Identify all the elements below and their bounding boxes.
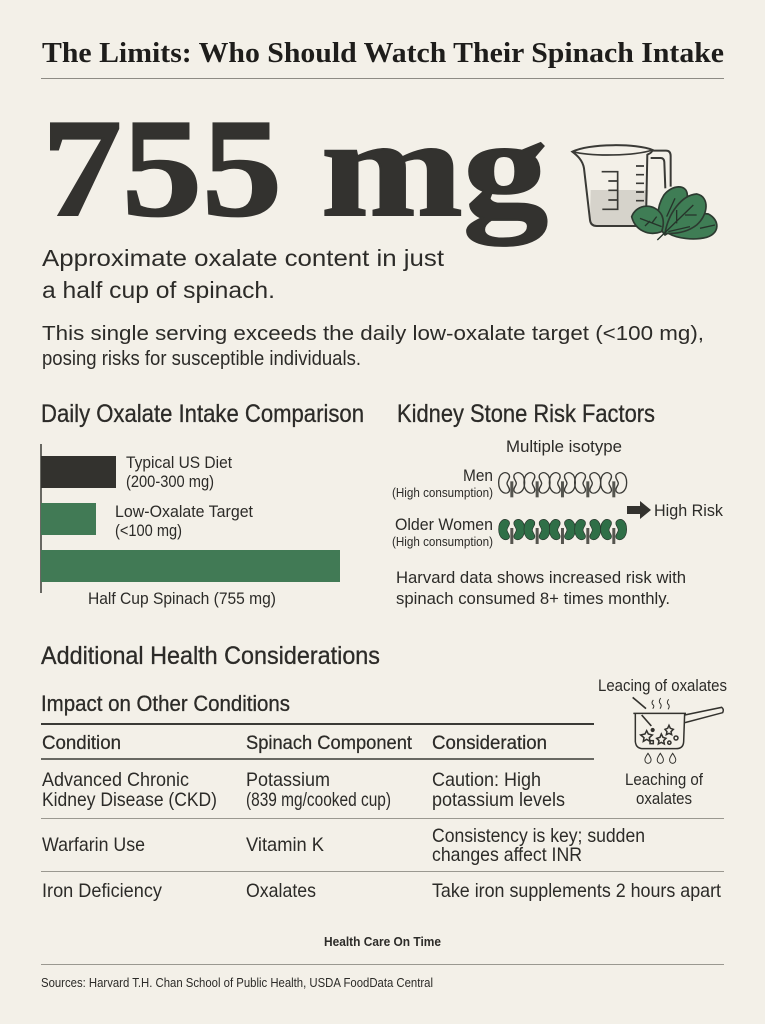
kidney risk graphic: [392, 437, 723, 549]
row: iron deficiency: Take iron supplements 2 hours apart: [432, 880, 722, 902]
row: warfarin: Consistency is key; sudden: [432, 825, 645, 847]
bar: typical US diet: [41, 453, 232, 491]
bar chart: daily oxalate intake: [41, 444, 340, 608]
big number: 755 mg: 755: [42, 91, 282, 246]
heading: daily oxalate intake comparison: Daily Oxalate Intake Comparison: [41, 400, 364, 428]
row: iron deficiency: [42, 880, 722, 902]
text block: serving exceeds target: posing risks for susceptible individuals.: [42, 347, 361, 370]
text block: Harvard data: Harvard data shows increased risk with: [396, 568, 686, 587]
arrow: high risk: [627, 501, 651, 519]
bar: typical US diet: Typical US Diet: [126, 453, 232, 472]
table header: Spinach Component: [246, 732, 413, 754]
text block: Harvard data: spinach consumed 8+ times monthly.: [396, 589, 670, 608]
row: warfarin: Vitamin K: [246, 834, 324, 856]
row: warfarin: changes affect INR: [432, 844, 582, 866]
row: CKD: potassium levels: [432, 789, 565, 811]
subheading: approximate oxalate content: [42, 245, 445, 303]
icon: pot with leaching oxalates: [598, 676, 727, 808]
subheading: approximate oxalate content: Approximate oxalate content in just: [42, 245, 445, 271]
heading: kidney stone risk factors: Kidney Stone Risk Factors: [397, 400, 655, 428]
sources: Sources: Harvard T.H. Chan School of Public Health, USDA FoodData Central: [41, 976, 433, 990]
row: CKD: Advanced Chronic: [42, 769, 189, 791]
row: CKD: [42, 769, 565, 811]
row: men: (High consumption): [392, 486, 493, 500]
row: older women: [392, 515, 627, 549]
bar: low-oxalate target: (<100 mg): [115, 521, 182, 540]
row: older women: Older Women: [395, 515, 493, 534]
row: CKD: Potassium: [246, 769, 330, 791]
row: men: [392, 466, 627, 500]
row: men: Men: [463, 466, 493, 485]
row: CKD: (839 mg/cooked cup): [246, 789, 391, 811]
text block: Harvard data: [396, 568, 686, 608]
title: The Limits: Who Should Watch Their Spinach Intake: [42, 37, 724, 69]
subheading: impact on other conditions: Impact on Other Conditions: [41, 691, 290, 716]
table header: Condition: [42, 732, 121, 754]
heading: additional health considerations: Additional Health Considerations: [41, 642, 380, 670]
row: iron deficiency: Iron Deficiency: [42, 880, 162, 902]
icon: pot with leaching oxalates: Leacing of oxalates: [598, 676, 727, 695]
icon: pot with leaching oxalates: oxalates: [636, 789, 692, 808]
icon: pot with leaching oxalates: Leaching of: [625, 770, 703, 789]
bar: low-oxalate target: Low-Oxalate Target: [115, 502, 253, 521]
bar: half cup spinach: [41, 550, 340, 608]
bar: typical US diet: (200-300 mg): [126, 472, 214, 491]
brand: health care on time: Health Care On Time: [324, 935, 441, 949]
row: older women: (High consumption): [392, 535, 493, 549]
table header: Consideration: [432, 732, 547, 754]
kidney risk graphic: Multiple isotype: [506, 437, 622, 456]
row: CKD: Kidney Disease (CKD): [42, 789, 217, 811]
bar: low-oxalate target: [41, 502, 253, 540]
table: conditions: [41, 724, 724, 902]
row: warfarin: [42, 825, 645, 866]
bar: half cup spinach: Half Cup Spinach (755 mg): [88, 589, 276, 608]
subheading: approximate oxalate content: a half cup of spinach.: [42, 277, 275, 303]
icon: measuring cup with spinach: [572, 145, 717, 240]
row: CKD: Caution: High: [432, 769, 541, 791]
table header: [42, 732, 547, 754]
label: high risk: High Risk: [654, 501, 723, 520]
text block: serving exceeds target: This single serving exceeds the daily low-oxalate target (<100 mg),: [42, 322, 704, 345]
big number: 755 mg: mg: [321, 91, 548, 246]
row: warfarin: Warfarin Use: [42, 834, 145, 856]
big number: 755 mg: [42, 91, 548, 246]
text block: serving exceeds target: [42, 322, 704, 370]
row: iron deficiency: Oxalates: [246, 880, 316, 902]
